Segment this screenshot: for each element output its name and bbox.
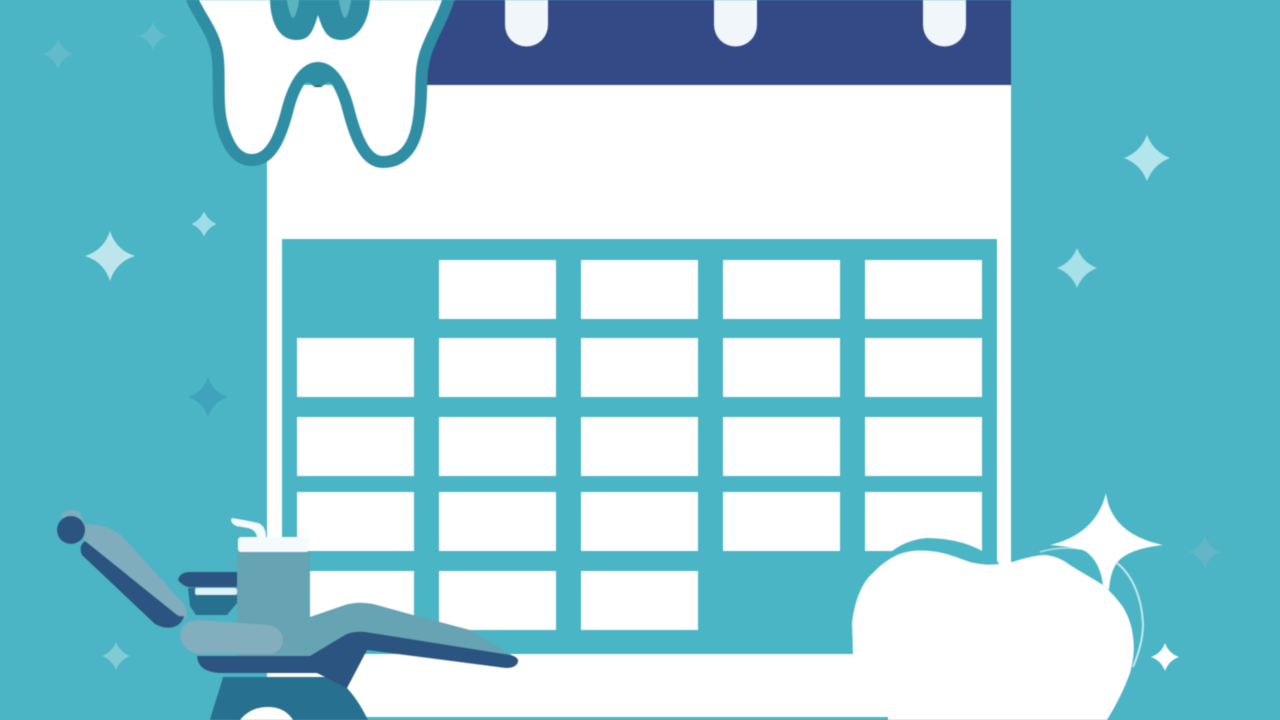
- seat cushion: [180, 620, 283, 654]
- chair base opening: [240, 707, 293, 720]
- armrest: [178, 572, 237, 615]
- tooth gloss line: [1040, 548, 1080, 552]
- calendar binding rings: [505, 0, 966, 46]
- faucet: [231, 518, 266, 537]
- tooth arch peak: [298, 62, 338, 88]
- icon: dental chair: [57, 510, 518, 720]
- tooth back outline: [880, 538, 1000, 572]
- tooth outline: [188, 0, 452, 162]
- tooth outer arc: [1117, 563, 1143, 667]
- headrest: [57, 516, 85, 544]
- calendar: [267, 0, 1011, 720]
- chair frame: [197, 632, 518, 688]
- tooth crown highlights: [287, 0, 351, 18]
- calendar grid panel: [282, 239, 997, 654]
- tooth dark dot: [313, 86, 323, 87]
- seat back cushion: [60, 510, 187, 622]
- calendar bottom edge: [345, 717, 888, 720]
- icon: shining tooth, bottom right: [852, 493, 1163, 720]
- leg rest cushion: [310, 603, 513, 656]
- calendar page: [267, 85, 1011, 720]
- chair base: [210, 677, 368, 720]
- chair column: [237, 552, 310, 656]
- tooth crown detail: [270, 0, 370, 40]
- icon: molar tooth, top left: [188, 0, 452, 162]
- large sparkle: [1050, 493, 1163, 590]
- seat back shell: [81, 541, 184, 628]
- tooth body: [852, 550, 1134, 720]
- calendar date cells: [297, 260, 982, 630]
- calendar header band: [410, 0, 1011, 85]
- cup top: [238, 537, 309, 552]
